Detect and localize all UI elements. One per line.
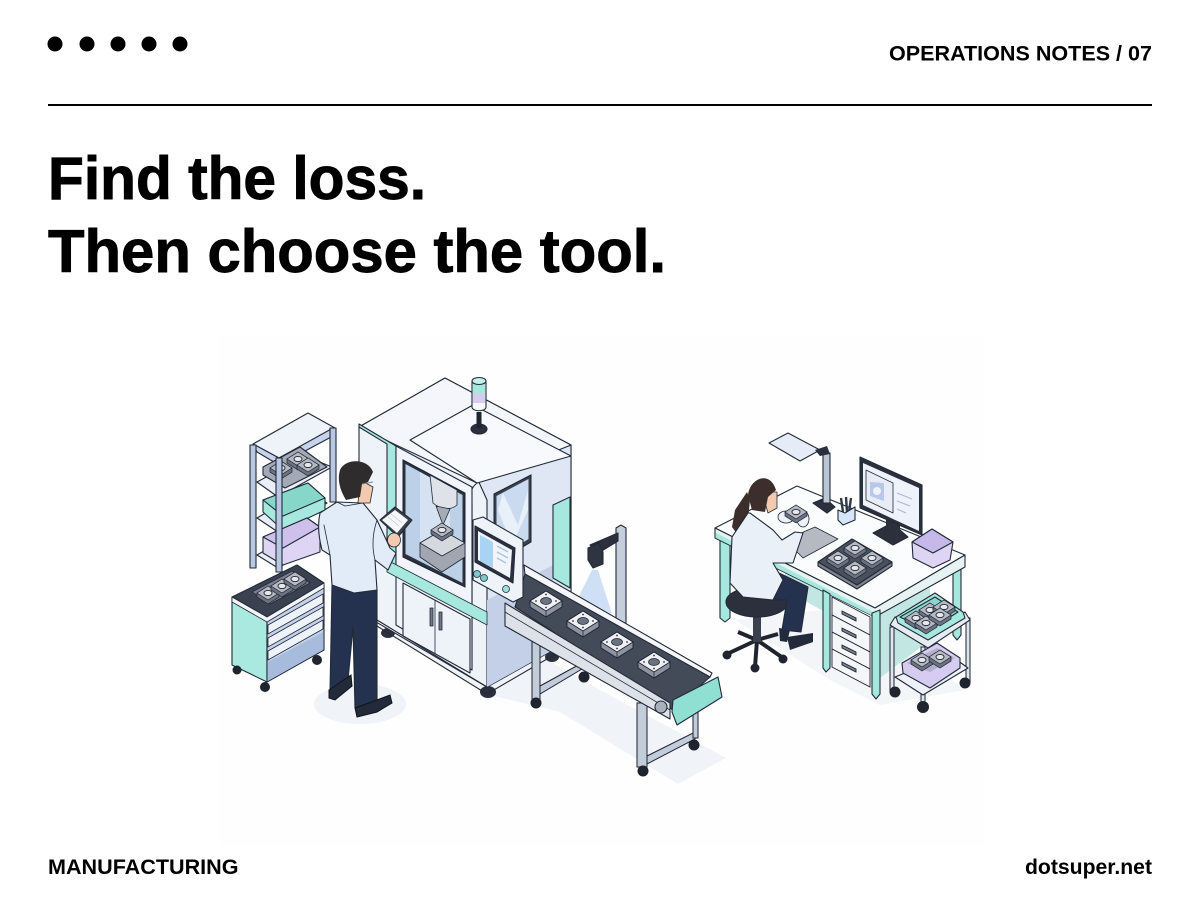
- shoes: [779, 628, 813, 650]
- footer category: MANUFACTURING: [48, 856, 238, 879]
- machine window: [403, 460, 465, 587]
- spindle: [430, 475, 457, 525]
- shirt: [319, 502, 396, 593]
- lower doors: [403, 583, 470, 673]
- section label: OPERATIONS NOTES / 07: [889, 42, 1152, 66]
- trousers: [773, 572, 808, 632]
- side cart: [890, 593, 970, 713]
- conveyor legs: [531, 636, 699, 776]
- worker with clipboard: [319, 461, 412, 717]
- desk legs: [823, 590, 830, 672]
- signal tower: [471, 378, 487, 434]
- machine top: [359, 378, 571, 483]
- tray of parts: [263, 447, 327, 488]
- stool: [722, 587, 788, 672]
- hand: [388, 533, 400, 547]
- storage shelf: [250, 413, 336, 572]
- side rail: [505, 603, 670, 719]
- camera post: [588, 525, 626, 627]
- under-desk panels: [785, 565, 930, 678]
- title: [48, 145, 666, 285]
- header dots: [48, 36, 188, 52]
- lower bin: [902, 643, 960, 688]
- workpiece: [420, 523, 465, 572]
- right face: [477, 445, 571, 687]
- teal bin: [263, 483, 325, 530]
- belt: [515, 574, 710, 710]
- desk lamp: [769, 433, 835, 513]
- purple bin: [263, 518, 320, 565]
- footer site: dotsuper.net: [1025, 856, 1152, 879]
- ponytail: [732, 492, 750, 535]
- right window: [494, 475, 531, 564]
- pen cup: [838, 497, 855, 525]
- teal band: [387, 560, 487, 625]
- grey mat: [785, 527, 838, 558]
- parts tray: [818, 539, 892, 589]
- teal tray: [896, 593, 965, 640]
- monitor: [860, 457, 922, 545]
- shoes: [329, 675, 392, 717]
- drawers: [832, 597, 870, 687]
- lab coat: [730, 513, 803, 600]
- title: Find the loss.: [48, 145, 426, 212]
- gloved hands and part: [778, 505, 809, 527]
- workbench: [715, 433, 965, 699]
- clipboard: [380, 507, 412, 537]
- tool cart: [232, 565, 324, 692]
- inspector at bench: [722, 478, 813, 672]
- purple bin: [912, 529, 953, 568]
- teal strip right: [553, 497, 570, 588]
- head: [339, 461, 373, 503]
- machine feet: [381, 628, 559, 698]
- floor shadows: [314, 610, 965, 784]
- teal end cap: [672, 677, 722, 725]
- control panel: [473, 517, 523, 602]
- front panel: [396, 446, 472, 670]
- teal strip left: [359, 424, 396, 570]
- head: [748, 478, 777, 513]
- back leg left: [720, 538, 730, 622]
- conveyor: [505, 525, 722, 776]
- trousers: [330, 585, 377, 708]
- desktop: [715, 486, 965, 608]
- illustration: [220, 335, 985, 845]
- light cone: [578, 570, 612, 614]
- machining centre: [359, 378, 571, 698]
- title: Then choose the tool.: [48, 218, 666, 285]
